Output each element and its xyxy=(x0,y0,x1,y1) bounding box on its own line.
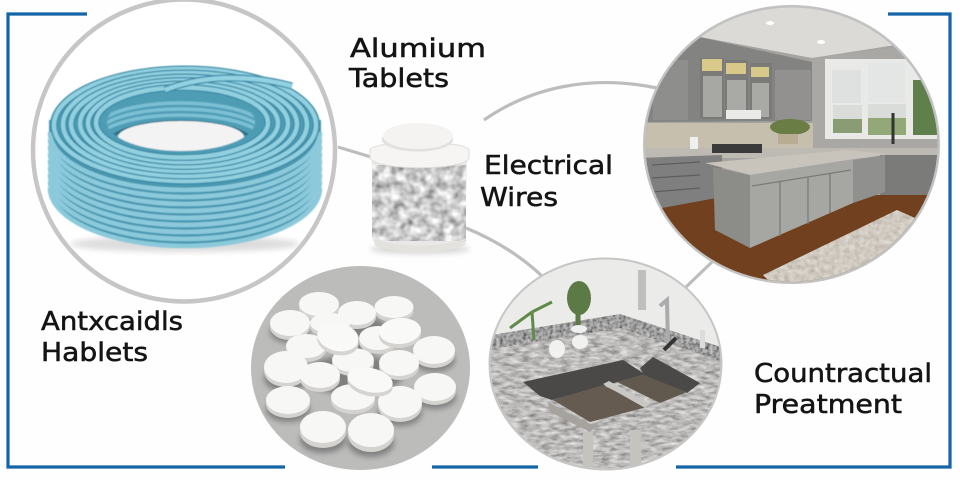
panel: wire coil circle xyxy=(33,0,335,302)
label: Alumium Tablets: Tablets xyxy=(348,64,449,94)
icon: white tablets pile xyxy=(264,292,456,457)
illustration: kitchen xyxy=(640,0,940,290)
label: Electrical Wires: Wires xyxy=(480,183,558,213)
panel: tablets circle xyxy=(251,266,470,470)
label: Countractual Preatment: Countractual xyxy=(754,359,932,389)
connector lines xyxy=(338,83,713,287)
label: Countractual Preatment: Preatment xyxy=(754,390,902,420)
label: Alumium Tablets: Alumium xyxy=(350,34,486,64)
illustration: granite sink xyxy=(490,260,720,468)
icon: foil canister with white lid xyxy=(370,123,470,254)
label: Countractual Preatment xyxy=(754,359,932,420)
panel: kitchen circle xyxy=(640,0,940,290)
label: Antxcaidls Hablets: Antxcaidls xyxy=(41,307,183,337)
label: Electrical Wires: Electrical xyxy=(484,151,613,181)
label: Electrical Wires xyxy=(480,151,613,213)
label: Antxcaidls Hablets xyxy=(41,307,183,368)
label: Antxcaidls Hablets: Hablets xyxy=(41,338,148,368)
label: Alumium Tablets xyxy=(348,34,486,94)
icon: blue wire coil xyxy=(49,66,321,252)
panel: sink circle xyxy=(480,255,730,475)
